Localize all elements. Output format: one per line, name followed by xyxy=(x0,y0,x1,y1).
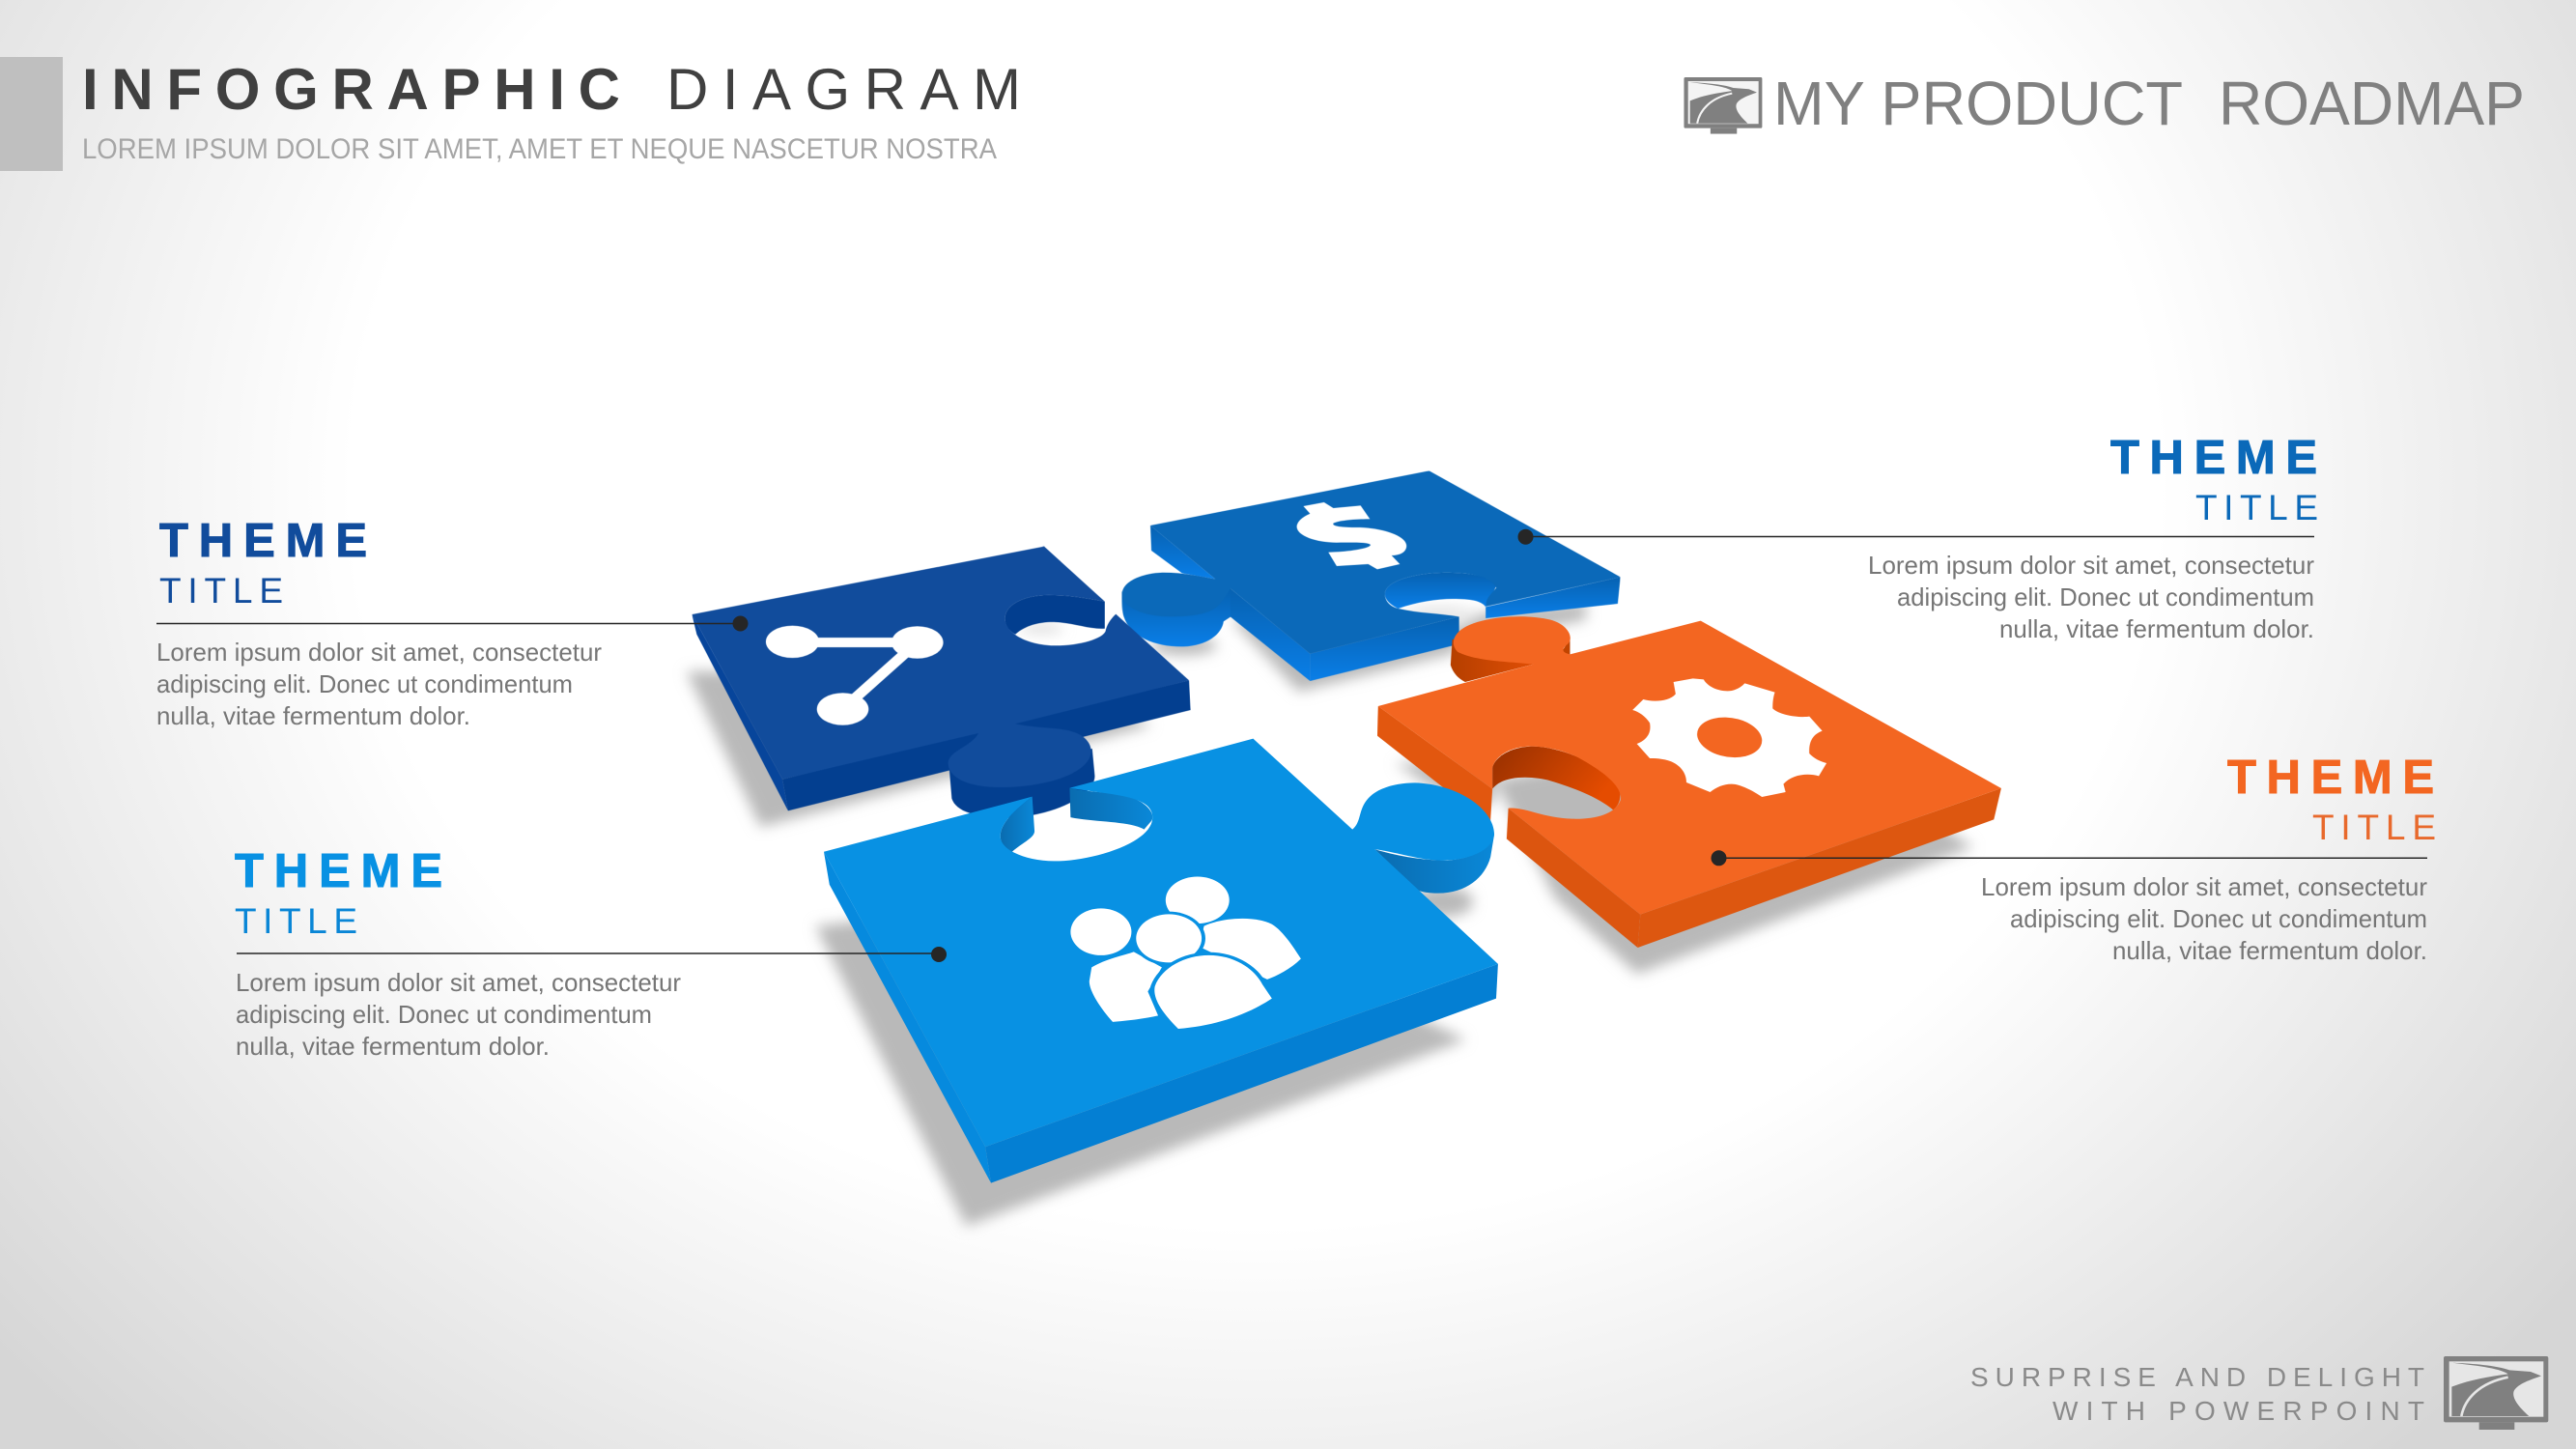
callout: top-right blue theme: TITLE xyxy=(2195,488,2318,527)
icon: share nodes xyxy=(766,626,944,725)
callout: dark blue theme: TITLE xyxy=(159,571,283,611)
callout: light blue theme: TITLE xyxy=(235,901,357,941)
callout: dark blue theme: nulla, vitae fermentum dolor. xyxy=(156,701,470,730)
callout: light blue theme xyxy=(235,845,947,1061)
puzzle piece: orange xyxy=(1377,616,2001,948)
title xyxy=(82,57,1021,122)
callout: top-right blue theme: adipiscing elit. Donec ut condimentum xyxy=(1897,582,2314,611)
callout: dark blue theme xyxy=(156,515,748,730)
callout: dark blue theme: adipiscing elit. Donec ut condimentum xyxy=(156,669,573,698)
callout: orange theme xyxy=(1712,752,2436,965)
brand title xyxy=(1773,69,2525,138)
callout: top-right blue theme xyxy=(1518,432,2318,643)
drop shadows under puzzle pieces xyxy=(687,602,1973,1226)
icon: people group xyxy=(1070,876,1301,1029)
puzzle piece: dark blue xyxy=(692,547,1191,818)
callout: top-right blue theme: THEME xyxy=(2110,432,2317,484)
brand title: ROADMAP xyxy=(2219,69,2525,138)
icon: gear xyxy=(1632,678,1826,797)
icon: dollar sign xyxy=(1297,502,1406,569)
brand title: MY PRODUCT xyxy=(1773,69,2183,138)
callout: dark blue theme: THEME xyxy=(159,515,367,567)
title: DIAGRAM xyxy=(666,57,1021,122)
callout: top-right blue theme: Lorem ipsum dolor sit amet, consectetur xyxy=(1868,551,2314,580)
callout: light blue theme: Lorem ipsum dolor sit amet, consectetur xyxy=(236,968,681,997)
title: INFOGRAPHIC xyxy=(82,57,620,122)
footer tagline: SURPRISE AND DELIGHT xyxy=(1970,1362,2424,1392)
callout: orange theme: nulla, vitae fermentum dolor. xyxy=(2112,936,2427,965)
puzzle piece: light blue xyxy=(824,739,1498,1183)
icon: road monitor logo xyxy=(1684,77,1762,134)
callout: orange theme: Lorem ipsum dolor sit amet, consectetur xyxy=(1981,872,2427,901)
footer tagline: WITH POWERPOINT xyxy=(2052,1396,2424,1426)
icon: footer road monitor logo xyxy=(2444,1356,2548,1430)
callout: light blue theme: adipiscing elit. Donec ut condimentum xyxy=(236,1000,652,1029)
footer tagline xyxy=(1970,1362,2424,1426)
header accent block xyxy=(0,57,63,171)
callout: dark blue theme: Lorem ipsum dolor sit amet, consectetur xyxy=(156,638,602,667)
callout: light blue theme: THEME xyxy=(235,845,442,897)
callout: orange theme: TITLE xyxy=(2312,808,2436,847)
callout: orange theme: THEME xyxy=(2227,752,2434,804)
puzzle piece: top-right blue xyxy=(1122,470,1621,681)
callout: top-right blue theme: nulla, vitae fermentum dolor. xyxy=(1999,614,2314,643)
callout: orange theme: adipiscing elit. Donec ut condimentum xyxy=(2010,904,2427,933)
callout: light blue theme: nulla, vitae fermentum dolor. xyxy=(236,1032,550,1061)
subtitle: LOREM IPSUM DOLOR SIT AMET, AMET ET NEQUE NASCETUR NOSTRA xyxy=(82,133,997,165)
